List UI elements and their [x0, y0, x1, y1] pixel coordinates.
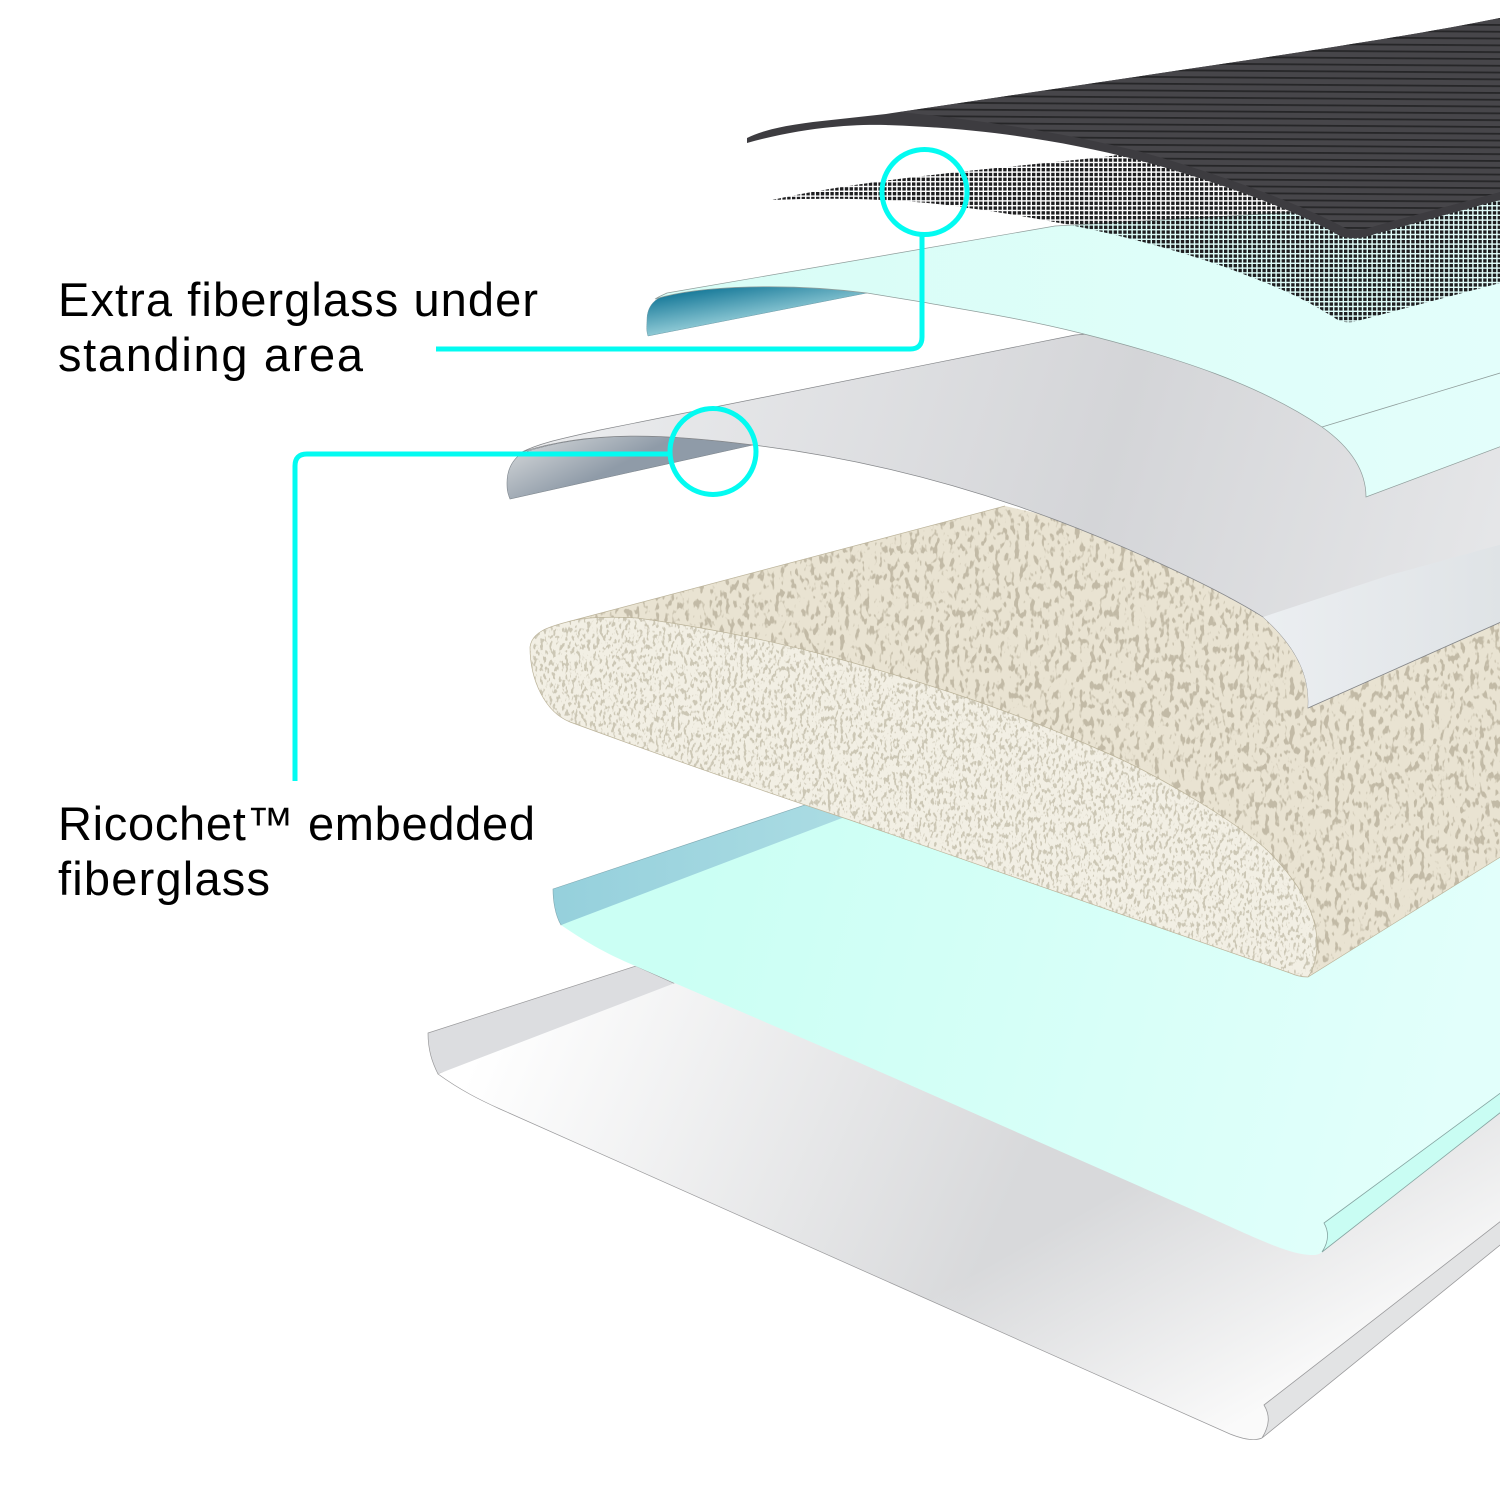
- callout leader line: [436, 236, 922, 349]
- layer: dark ribbed top deck: [747, 18, 1500, 238]
- upper fiberglass fold line: [1322, 370, 1500, 427]
- bottom sheet right lip: [1262, 1214, 1500, 1438]
- upper fiberglass surface: [655, 200, 1500, 497]
- label: Ricochet embedded fiberglass: [58, 797, 535, 905]
- gray sheet surface: [522, 300, 1500, 708]
- layer: Ricochet embedded fiberglass sheet: [507, 300, 1500, 708]
- callout: Ricochet connector: [295, 408, 756, 781]
- callout leader line: [295, 454, 669, 781]
- upper fiberglass underside: [647, 286, 867, 336]
- label: Ricochet embedded fiberglass: fiberglass: [58, 852, 270, 905]
- foam top face: [582, 506, 1500, 976]
- deck rim: [747, 18, 1500, 238]
- deck ribs: [900, 18, 1500, 230]
- label: extra fiberglass: [58, 273, 538, 381]
- foam front face: [530, 618, 1316, 976]
- layer: mesh sheet: [772, 100, 1500, 322]
- lower fiberglass blue lip: [553, 804, 870, 925]
- lower fiberglass surface: [561, 815, 1500, 1255]
- gray sheet front band: [1263, 542, 1500, 708]
- label: extra fiberglass: Extra fiberglass under: [58, 273, 538, 326]
- lower fiberglass right lip: [1322, 1086, 1500, 1252]
- callout circle: [670, 408, 756, 494]
- label: Ricochet embedded fiberglass: Ricochet™ embedded: [58, 797, 535, 850]
- bottom sheet back lip: [428, 966, 700, 1074]
- layer: lower fiberglass sheet: [553, 804, 1500, 1255]
- layer: bottom white sheet: [428, 966, 1500, 1440]
- bottom sheet surface: [438, 983, 1500, 1440]
- gray sheet underside: [507, 436, 753, 499]
- callout circle: [882, 150, 967, 234]
- layer: upper fiberglass sheet: [647, 200, 1500, 497]
- label: extra fiberglass: standing area: [58, 328, 364, 381]
- layer: textured foam core: [520, 490, 1500, 990]
- callout: standing area connector: [436, 150, 967, 349]
